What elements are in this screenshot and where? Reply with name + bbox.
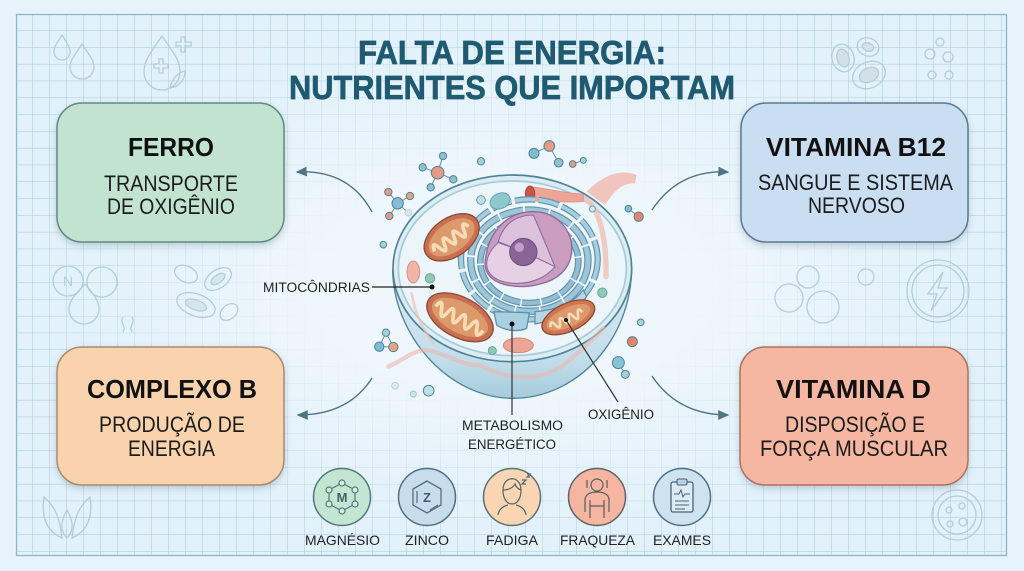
- panel: vitamina d: [740, 347, 968, 485]
- arrow: to vitamina d: [652, 376, 728, 415]
- title: NUTRIENTES QUE IMPORTAM: [289, 69, 735, 106]
- label: mitocôndrias: MITOCÔNDRIAS: [263, 280, 370, 295]
- label: oxigênio: OXIGÊNIO: [588, 407, 654, 422]
- label: exames: EXAMES: [653, 532, 711, 548]
- icon: exames: [654, 468, 710, 526]
- panel: ferro: [57, 103, 284, 242]
- nucleus: [485, 212, 572, 287]
- vessels inside cell: [388, 197, 606, 377]
- label: oxigênio: [564, 318, 654, 422]
- icon: fraqueza: [568, 468, 626, 526]
- panel: vitamina d: FORÇA MUSCULAR: [760, 436, 948, 461]
- label: metabolismo energético: [462, 322, 563, 452]
- icon: magnésio: M: [337, 490, 347, 505]
- label: metabolismo energético: ENERGÉTICO: [468, 437, 556, 452]
- background icons: N: [63, 273, 73, 289]
- arrow: to complexo b: [298, 378, 372, 415]
- label: magnésio: MAGNÉSIO: [305, 532, 380, 548]
- panel: ferro: TRANSPORTE: [104, 171, 238, 196]
- label: metabolismo energético: METABOLISMO: [462, 418, 563, 433]
- label: fadiga: FADIGA: [486, 532, 539, 548]
- cell interior: [393, 175, 632, 362]
- panel: complexo b: [57, 347, 284, 485]
- panel: vitamina d: VITAMINA D: [776, 374, 931, 404]
- panel: vitamina b12: [741, 103, 968, 242]
- label: mitocôndrias: [263, 280, 434, 295]
- icon: zinco: [398, 468, 456, 526]
- cell body: [393, 267, 632, 398]
- panel: vitamina b12: SANGUE E SISTEMA: [758, 170, 953, 195]
- panel: vitamina b12: NERVOSO: [808, 193, 905, 218]
- organelles: [407, 190, 607, 355]
- icon: magnésio: [314, 468, 370, 526]
- mitochondrion: [419, 283, 501, 352]
- panel: vitamina d: DISPOSIÇÃO E: [785, 412, 925, 437]
- panel: ferro: DE OXIGÊNIO: [107, 194, 235, 219]
- panel: vitamina b12: VITAMINA B12: [766, 132, 946, 162]
- arrow: to ferro: [297, 172, 372, 212]
- cell illustration: [375, 141, 644, 398]
- panel: complexo b: ENERGIA: [128, 436, 215, 461]
- panel: complexo b: COMPLEXO B: [87, 374, 257, 404]
- mitochondrion: [537, 293, 600, 342]
- title: [289, 34, 735, 106]
- molecules: [375, 141, 644, 397]
- icon: fadiga: [484, 468, 540, 526]
- mitochondrion: [415, 204, 488, 271]
- title: FALTA DE ENERGIA:: [358, 34, 666, 71]
- icon: zinco: Z: [423, 490, 431, 505]
- vessel behind cell: [587, 172, 637, 205]
- arrow: to vitamina b12: [652, 172, 728, 210]
- panel: complexo b: PRODUÇÃO DE: [99, 412, 245, 437]
- panel: ferro: FERRO: [128, 132, 214, 162]
- endoplasmic reticulum: [461, 199, 598, 319]
- label: fraqueza: FRAQUEZA: [560, 532, 636, 548]
- label: zinco: ZINCO: [405, 532, 449, 548]
